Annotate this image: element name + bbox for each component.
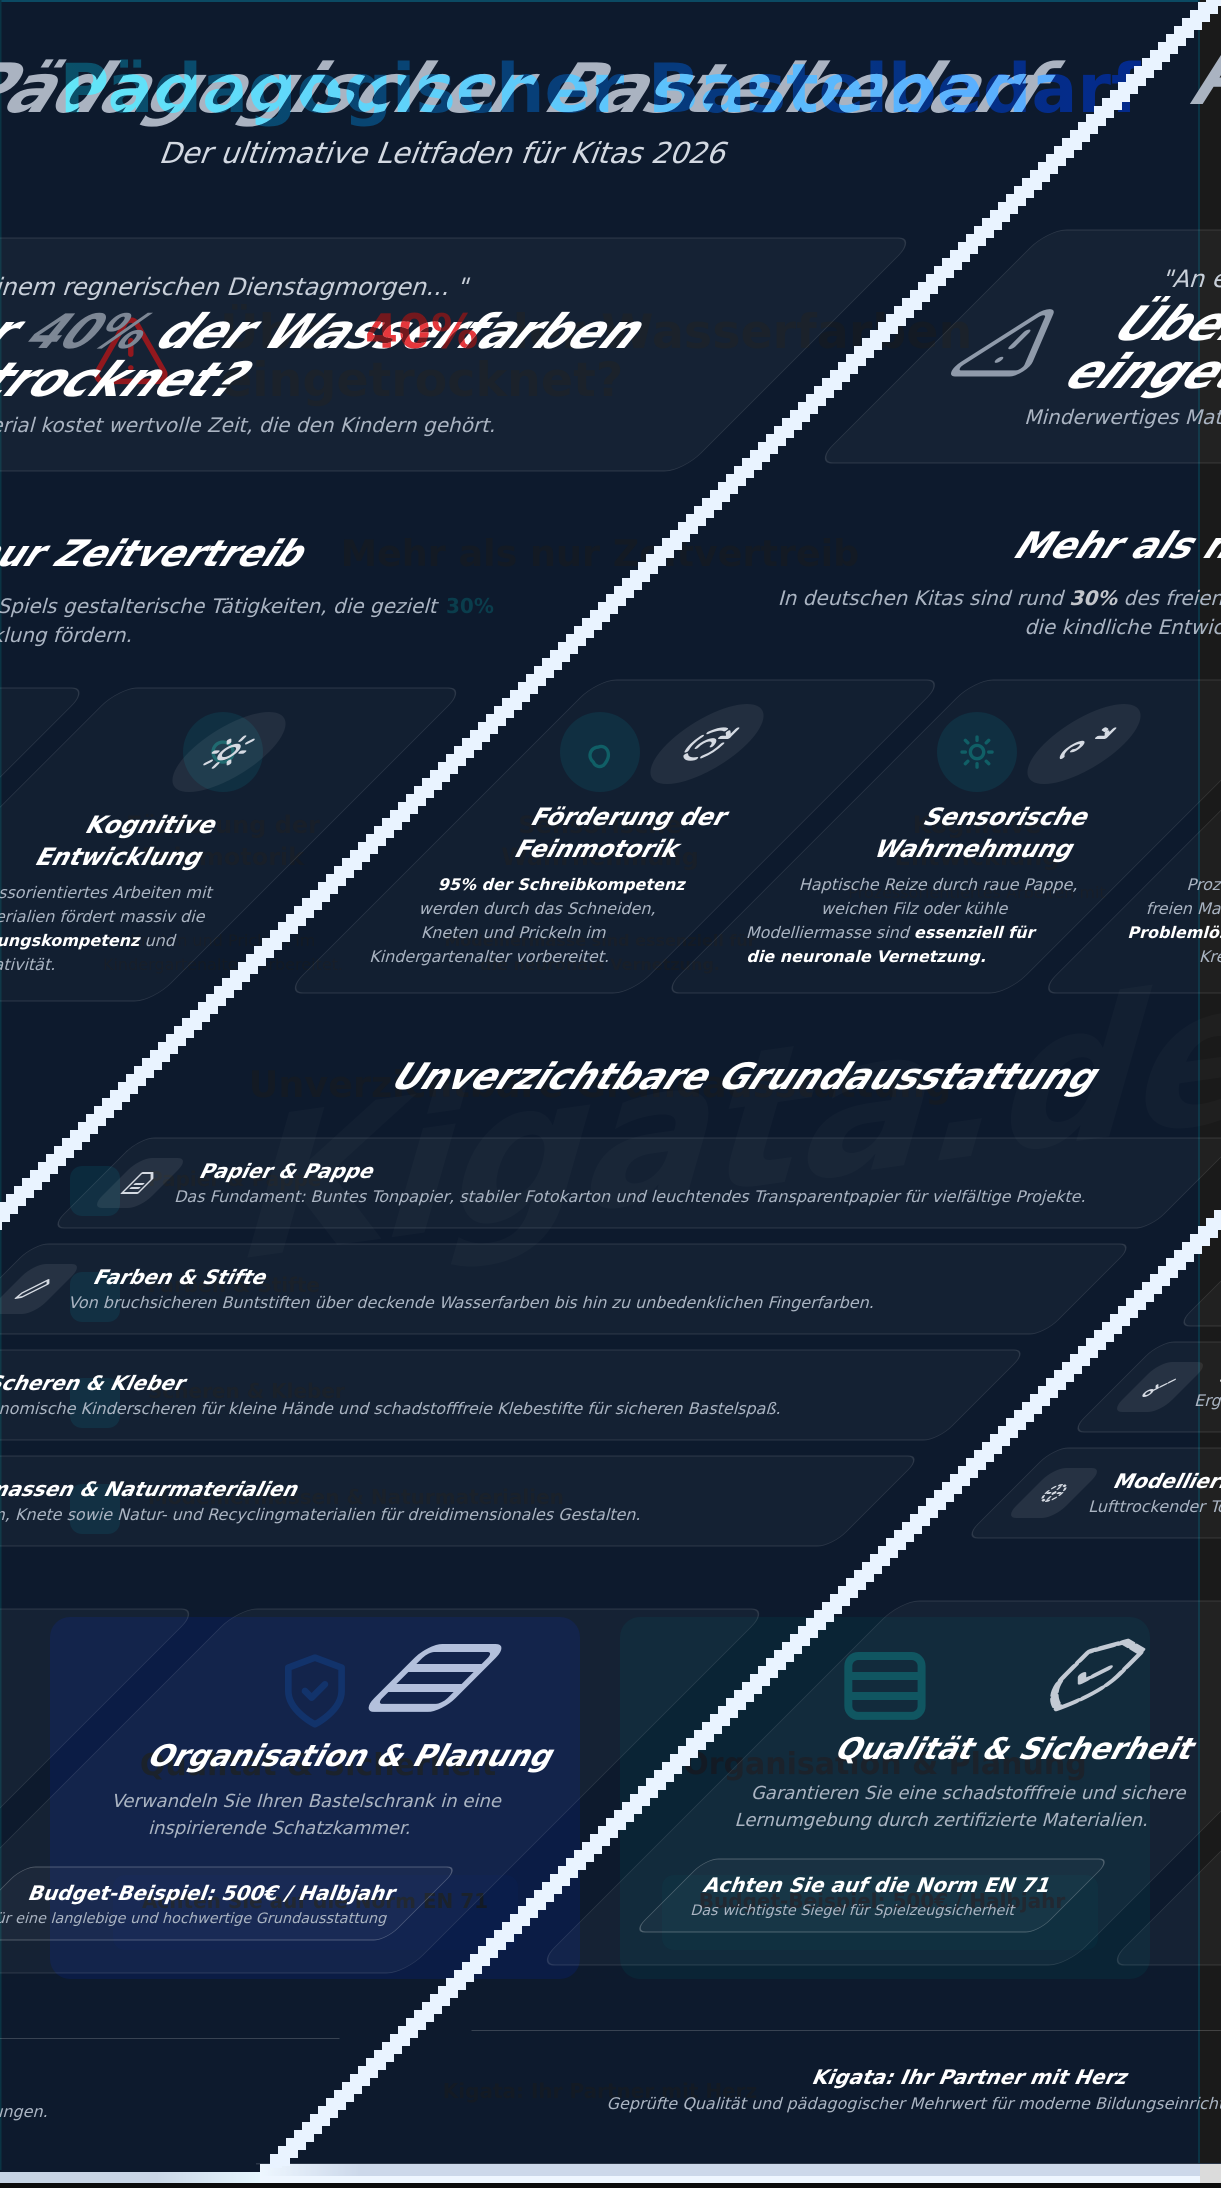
paints text [53, 1265, 920, 1312]
bottom black edge [0, 2183, 1221, 2188]
ghost card text [103, 883, 1106, 974]
icon: pencil [0, 1264, 84, 1314]
panel: sensory [662, 680, 1221, 993]
cognitive text [0, 883, 246, 974]
sheared copy C: right of second seam [389, 1236, 1221, 2113]
icon: cognitive [149, 712, 309, 792]
list row: scissors [0, 1350, 1028, 1440]
panel: quality fragment [0, 1609, 199, 1973]
fine motor text: Kindergartenalter vorbereitet. [368, 947, 613, 966]
icon: paper [90, 1158, 190, 1208]
ghost panel headings [140, 1747, 1087, 1783]
ghost list headings: Modelliermassen & Naturmaterialien [148, 1485, 564, 1509]
ghost statistic: 30% [446, 594, 494, 618]
panel: quality [537, 1601, 1221, 1965]
icon: shapes [1004, 1468, 1104, 1518]
fine motor text: werden durch das Schneiden, [417, 899, 659, 918]
ghost quality panel [50, 1617, 580, 1979]
list row: scissors [1070, 1342, 1221, 1432]
quality text [707, 1783, 1205, 1831]
cognitive text fragment [1083, 875, 1221, 966]
quality text: Garantieren Sie eine schadstofffreie und sichere [749, 1783, 1190, 1804]
paper text: Das Fundament: Buntes Tonpapier, stabiler Fotokarton und leuchtendes Transparentpapier für vielfältige Projekte. [173, 1187, 1090, 1206]
panel: organisation [0, 1609, 769, 1973]
modelling text [1073, 1469, 1221, 1516]
footer rule [471, 2030, 1221, 2031]
cognitive heading [16, 811, 255, 872]
list row: modelling [0, 1456, 922, 1546]
sensory text [707, 875, 1100, 966]
modelling text [0, 1477, 686, 1524]
icon: fine motor [627, 704, 787, 784]
hero heading [1041, 296, 1221, 399]
ghost inner box right [662, 1875, 1098, 1950]
ghost inner box headings [142, 1889, 1065, 1913]
budget box [0, 1867, 459, 1940]
ghost card text: Kindergartenalter vorbereitet. [103, 955, 343, 974]
equipment heading: Unverzichtbare Grundausstattung [382, 1056, 1111, 1098]
ghost hero heading: eingetrocknet? [220, 353, 623, 408]
sensory text: Haptische Reize durch raue Pappe, [798, 875, 1081, 894]
ghost card headings: Sensorische [518, 811, 682, 839]
ghost card text: Modelliermasse sind essenziell für [444, 931, 756, 950]
ghost card headings [126, 811, 1060, 871]
diagonal seam one [0, 0, 1221, 1296]
fine motor heading: Feinmotorik [509, 835, 687, 864]
ghost list headings: Papier & Pappe [148, 1167, 321, 1191]
quality text: Lernumgebung durch zertifizierte Materialien. [733, 1810, 1152, 1831]
bottom light band [0, 2163, 1221, 2183]
icon: warning triangle [951, 312, 1081, 373]
hero statistic overlap highlight: 40% [365, 305, 479, 360]
fine motor heading [480, 803, 748, 864]
ghost card headings: Wahrnehmung [501, 843, 699, 871]
list row: paper [50, 1138, 1221, 1228]
sensory heading: Wahrnehmung [869, 835, 1081, 864]
top accent bar [0, 0, 1200, 2]
panel: fine motor [285, 680, 945, 993]
fine motor text: Kneten und Prickeln im [420, 923, 609, 942]
scissors text [1179, 1363, 1221, 1410]
ghost card text: die neuronale Vernetzung. [480, 955, 720, 974]
list row: paints fragment [1176, 1236, 1221, 1326]
scissors text [0, 1371, 826, 1418]
icon: archive [368, 1648, 502, 1708]
sensory text: weichen Filz oder kühle [820, 899, 1011, 918]
ghost panel headings: Qualität & Sicherheit [140, 1748, 496, 1783]
title overlap highlight: Pädagogischer Bastelbedarf [60, 50, 1142, 129]
norm box [633, 1859, 1111, 1932]
sensory heading: Sensorische [918, 803, 1096, 832]
ghost card text: Kneten und Prickeln im [131, 931, 315, 950]
panel: sensory [0, 688, 89, 1001]
fine motor text: 95% der Schreibkompetenz [436, 875, 688, 894]
ghost card headings: Förderung der [126, 811, 320, 839]
cognitive heading: Entwicklung [30, 843, 210, 872]
ghost card headings: Entwicklung [894, 843, 1060, 871]
cognitive heading: Kognitive [80, 811, 223, 840]
section text [0, 594, 459, 647]
organisation text: Verwandeln Sie Ihren Bastelschrank in eine [110, 1791, 505, 1812]
ghost inner box headings: Achten Sie auf die Norm EN 71 [142, 1889, 488, 1913]
ghost archive icon [848, 1656, 922, 1716]
norm title: Achten Sie auf die Norm EN 71 [700, 1874, 1055, 1897]
fine motor text [351, 875, 702, 966]
icon: scissors [1110, 1362, 1210, 1412]
paper text: Papier & Pappe [196, 1159, 380, 1183]
footer heading: Kigata: Ihr Partner mit Herz [809, 2066, 1133, 2089]
ghost section heading: Mehr als nur Zeitvertreib [341, 532, 859, 575]
ghost card text: Prozessorientiertes Arbeiten mit [848, 883, 1106, 902]
paints text: Farben & Stifte [90, 1265, 273, 1289]
ghost list headings: Scheren & Kleber [148, 1379, 345, 1403]
sensory text: Modelliermasse sind essenziell für [745, 923, 1038, 942]
diagonal seam two [276, 1176, 1221, 2168]
panel: cognitive fragment [1038, 680, 1221, 993]
ghost card headings: Feinmotorik [142, 843, 305, 871]
sensory text: die neuronale Vernetzung. [745, 947, 990, 966]
ghost warning icon [97, 320, 165, 381]
ghost inner box headings: Budget-Beispiel: 500€ / Halbjahr [699, 1889, 1065, 1913]
ghost hero heading: Über 40% der Wasserfarben [220, 303, 972, 360]
sheared copy A: left of first seam [0, 49, 1105, 1001]
ghost card headings: Kognitive [913, 811, 1041, 839]
panel: organisation fragment [1107, 1601, 1221, 1965]
list row: paints [0, 1244, 1134, 1334]
paints text: Von bruchsicheren Buntstiften über deckende Wasserfarben bis hin zu unbedenklichen Fingerfarben. [67, 1293, 878, 1312]
icon: sensory [1004, 704, 1164, 784]
footer rule [0, 2038, 340, 2039]
hero panel [0, 238, 916, 471]
ghost shield icon [288, 1658, 342, 1724]
ghost list headings: Farben & Stifte [148, 1273, 320, 1297]
section text [730, 586, 1221, 639]
quality heading: Qualität & Sicherheit [829, 1731, 1203, 1767]
organisation text [68, 1791, 520, 1839]
hero heading [0, 304, 674, 407]
ghost icon circles [183, 712, 1017, 792]
norm note: Das wichtigste Siegel für Spielzeugsicherheit [689, 1902, 1018, 1919]
ghost title: Pädagogischer Bastelbedarf [60, 50, 1142, 129]
ghost footer heading: Kigata: Ihr Partner mit Herz [443, 2079, 757, 2103]
ghost inner box left [113, 1875, 518, 1950]
paper text [159, 1159, 1131, 1206]
budget title: Budget-Beispiel: 500€ / Halbjahr [25, 1882, 401, 1905]
subtitle: Der ultimative Leitfaden für Kitas 2026 [155, 137, 734, 171]
ghost list headings [148, 1167, 564, 1509]
ghost hero heading [220, 303, 972, 408]
ghost panel headings: Organisation & Planung [683, 1747, 1087, 1782]
ghost organisation panel [620, 1617, 1150, 1979]
list row: modelling [964, 1448, 1221, 1538]
organisation heading: Organisation & Planung [142, 1738, 563, 1774]
fine motor heading: Förderung der [526, 803, 734, 832]
sensory heading [855, 803, 1127, 864]
hero panel [815, 230, 1221, 463]
ghost equipment heading: Unverzichtbare Grundausstattung [249, 1063, 951, 1106]
organisation text: inspirierende Schatzkammer. [146, 1818, 414, 1839]
ghost list icons [70, 1166, 120, 1534]
icon: shield [1032, 1642, 1152, 1708]
panel: cognitive [0, 688, 466, 1001]
